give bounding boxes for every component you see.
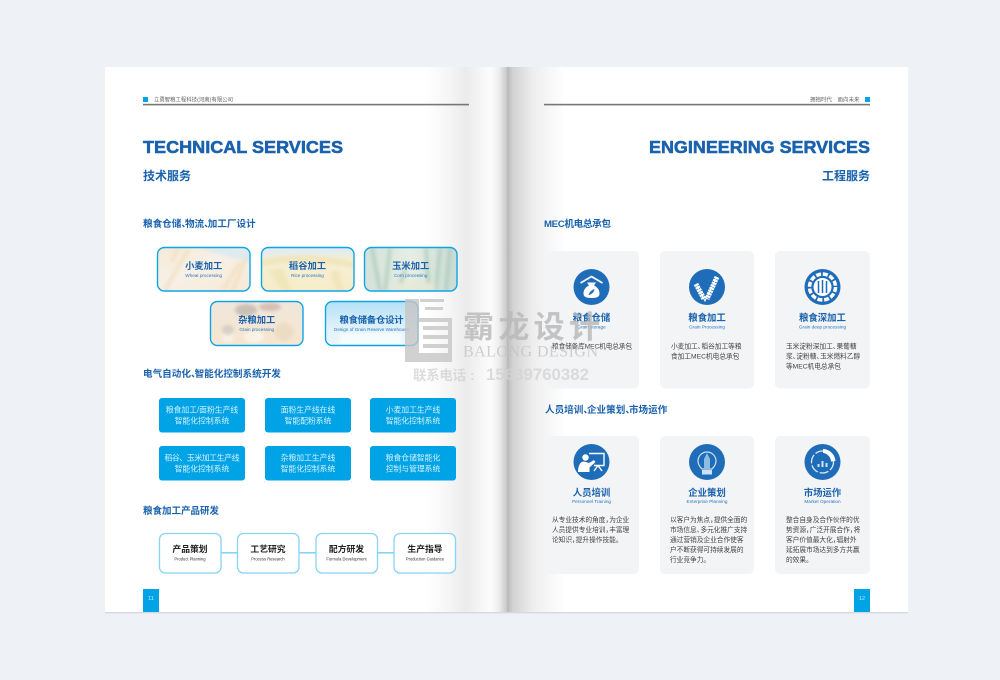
tile: rice <box>262 248 354 291</box>
button <box>370 446 456 480</box>
header: slogan: 面向未来 <box>838 96 860 104</box>
card: grain storage: 粮食储备库MEC机电总承包 <box>552 342 632 350</box>
watermark phone: 15639760382 <box>486 365 589 384</box>
step: 生产指导 <box>407 543 443 554</box>
tile: wheat <box>158 247 251 292</box>
header: slogan: 拥抱时代 <box>810 96 833 104</box>
watermark <box>405 299 600 384</box>
button: 面粉生产线在线 <box>281 404 335 414</box>
heading: training: 人员培训、企业策划、市场运作 <box>545 404 668 416</box>
step <box>316 534 378 573</box>
card: personnel training: 人员提供专业培训，丰富理 <box>552 525 630 534</box>
card: grain processing: Grain Processing <box>689 324 725 330</box>
card: market operation: 市场运作 <box>804 487 842 498</box>
card: enterprise planning: 以客户为焦点，提供全面的 <box>670 515 748 524</box>
card: deep processing <box>775 251 870 388</box>
card: personnel training: 人员培训 <box>573 487 610 498</box>
card: enterprise planning: 市场信息、多元化推广支持 <box>670 525 748 534</box>
button <box>370 398 456 432</box>
card: enterprise planning: 通过营销及企业合作使客 <box>670 535 744 544</box>
card: enterprise planning: Enterprise Planning <box>687 499 728 504</box>
tile: grain <box>210 302 303 346</box>
card: grain processing: 粮食加工 <box>688 312 726 323</box>
card: market operation: 客户价值最大化，辐射外 <box>786 535 857 544</box>
tile: rice: Rice processing <box>291 273 324 278</box>
card: enterprise planning: 户不断获得可持续发展的 <box>670 545 744 554</box>
card: personnel training: 从专业技术的角度，为企业 <box>552 515 630 524</box>
card: enterprise planning: 企业策划 <box>688 487 726 498</box>
heading: product development: 粮食加工产品研发 <box>143 505 220 517</box>
tile: warehouse <box>326 302 418 346</box>
step <box>394 534 456 573</box>
card: deep processing: Grain deep processing <box>799 324 846 330</box>
icon: trainer <box>574 444 610 480</box>
icon: gear <box>804 269 840 305</box>
button: 粮食仓储智能化 <box>386 452 440 462</box>
tile: warehouse: Design of Grain Reserve Warehouse <box>334 327 409 332</box>
page number 11 <box>143 589 159 612</box>
title: technical services: TECHNICAL SERVICES <box>143 137 343 157</box>
header: company name <box>143 96 469 105</box>
icon: light bulb <box>689 444 725 480</box>
card: grain storage <box>545 251 639 388</box>
step: Formula Development <box>326 556 367 562</box>
card: grain storage: 粮食仓储 <box>573 312 611 323</box>
icon: market chart <box>804 444 840 480</box>
button: 智能化控制系统 <box>175 416 229 426</box>
step: 配方研发 <box>329 543 364 554</box>
watermark phone <box>413 365 589 384</box>
icon: grain sack <box>574 269 610 305</box>
card: personnel training: Personnel Training <box>572 499 611 504</box>
subtitle: 工程服务 <box>822 168 870 183</box>
step: 工艺研究 <box>250 543 286 554</box>
step: 产品策划 <box>172 543 208 554</box>
heading: automation: 电气自动化、智能化控制系统开发 <box>143 368 281 380</box>
subtitle: 技术服务 <box>143 168 191 183</box>
step: Product Planning <box>174 556 206 562</box>
page number 12: 12 <box>859 596 865 602</box>
tile: grain: 杂粮加工 <box>238 314 275 325</box>
tile: corn: 玉米加工 <box>392 260 429 271</box>
card: market operation: 的效果。 <box>786 555 813 564</box>
card: grain processing <box>660 251 754 388</box>
card: grain processing: 食加工MEC机电总承包 <box>671 352 740 360</box>
tile: rice: 稻谷加工 <box>289 260 326 271</box>
button <box>159 398 245 432</box>
card: grain processing: 小麦加工、稻谷加工等粮 <box>671 342 742 350</box>
button: 智能化控制系统 <box>386 416 440 426</box>
title: engineering services: ENGINEERING SERVICES <box>649 137 870 157</box>
tile: grain: Grain processing <box>239 327 275 332</box>
watermark name: 霸龙设计 <box>463 310 600 345</box>
header: slogan <box>544 96 870 105</box>
card: market operation: 延拓展市场达到多方共赢 <box>786 545 860 554</box>
header: company name: 立勇智粮工程科技(河南)有限公司 <box>154 96 233 104</box>
button: 稻谷、玉米加工生产线 <box>164 452 240 462</box>
tile: wheat: 小麦加工 <box>185 260 222 271</box>
step <box>238 534 299 573</box>
button <box>265 446 351 480</box>
watermark english: BALONG DESIGN <box>463 344 598 360</box>
card: market operation <box>775 436 870 574</box>
card: deep processing: 玉米淀粉深加工、果葡糖 <box>786 342 857 350</box>
tile group: processing types <box>158 247 457 346</box>
card: market operation: 整合自身及合作伙伴的优 <box>786 515 860 524</box>
card: enterprise planning: 行业竞争力。 <box>670 555 710 564</box>
card: deep processing: 粮食深加工 <box>799 312 846 323</box>
button <box>159 446 245 480</box>
card: personnel training <box>545 436 639 574</box>
watermark logo <box>405 299 452 362</box>
card: enterprise planning <box>660 436 754 574</box>
button: 粮食加工/面粉生产线 <box>166 404 238 414</box>
card: market operation: 势资源，广泛开展合作，将 <box>786 525 861 534</box>
button: 杂粮加工生产线 <box>281 452 335 462</box>
button grid: control systems <box>159 398 456 480</box>
step: Production Guidance <box>406 556 445 562</box>
tile: warehouse: 粮食储备仓设计 <box>340 314 404 325</box>
button <box>265 398 351 432</box>
button: 小麦加工生产线 <box>386 404 440 414</box>
watermark phone: 联系电话 <box>413 367 466 383</box>
watermark phone: : <box>470 367 475 383</box>
button: 智能化控制系统 <box>175 464 229 474</box>
card: deep processing: 浆、淀粉糖、玉米燃料乙醇 <box>786 352 861 360</box>
tile: corn: Corn processing <box>394 273 428 278</box>
card: market operation: Market Operation <box>804 499 841 504</box>
step <box>160 534 221 573</box>
heading: design: 粮食仓储、物流、加工厂设计 <box>143 218 256 230</box>
panel: right page <box>507 67 908 614</box>
heading: MEC: MEC机电总承包 <box>544 218 611 230</box>
card: deep processing: 等MEC机电总承包 <box>786 362 841 370</box>
card: personnel training: 论知识，提升操作技能。 <box>552 535 623 544</box>
tile: corn <box>364 248 457 291</box>
button: 智能化控制系统 <box>281 464 335 474</box>
tile: wheat: Wheat processing <box>185 273 223 278</box>
process flow <box>160 534 456 573</box>
button: 智能配粉系统 <box>285 416 332 426</box>
page number 11: 11 <box>148 596 154 602</box>
icon: wheat <box>689 269 725 305</box>
page number 12 <box>854 589 870 612</box>
card: grain storage: Grain storage <box>577 324 606 330</box>
step: Process Research <box>251 556 285 562</box>
panel: left page <box>105 67 507 614</box>
button: 控制与管理系统 <box>386 464 440 474</box>
